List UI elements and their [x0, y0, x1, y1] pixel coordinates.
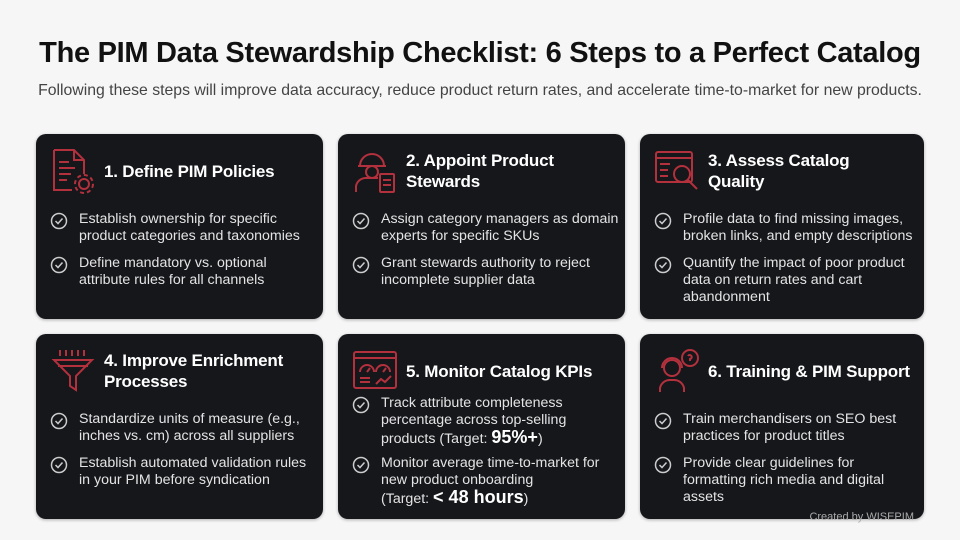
icon: dashboard	[353, 351, 397, 389]
checklist: (Target: < 48 hours)	[381, 487, 528, 507]
checklist: incomplete supplier data	[381, 272, 535, 288]
checklist: assets	[683, 489, 724, 505]
heading	[708, 151, 849, 191]
checklist: Define mandatory vs. optional	[79, 255, 267, 271]
checklist: Train merchandisers on SEO best	[683, 411, 896, 427]
checklist: data on return rates and cart	[683, 272, 862, 288]
checklist: product categories and taxonomies	[79, 228, 300, 244]
panel: step 5	[338, 334, 625, 519]
heading: Processes	[104, 372, 187, 391]
checklist: Monitor average time-to-market for	[381, 455, 599, 471]
checklist: Standardize units of measure (e.g.,	[79, 411, 300, 427]
heading: 4. Improve Enrichment	[104, 351, 283, 370]
heading: 3. Assess Catalog	[708, 151, 849, 170]
icon: support agent	[659, 349, 699, 392]
heading	[104, 351, 284, 391]
icon: steward	[355, 153, 395, 193]
checklist: Establish automated validation rules	[79, 455, 306, 471]
checklist: products (Target: 95%+)	[381, 427, 543, 447]
checklist	[654, 411, 896, 505]
heading: 5. Monitor Catalog KPIs	[406, 362, 592, 380]
checklist: broken links, and empty descriptions	[683, 228, 912, 244]
checklist	[50, 411, 306, 488]
heading: Quality	[708, 172, 764, 191]
checklist: percentage across top-selling	[381, 412, 566, 428]
checklist: abandonment	[683, 289, 770, 305]
heading: 2. Appoint Product	[406, 151, 554, 170]
checklist	[654, 211, 912, 305]
title: The PIM Data Stewardship Checklist: 6 Steps to a Perfect Catalog	[39, 37, 921, 69]
heading: 6. Training & PIM Support	[708, 362, 910, 380]
checklist: Establish ownership for specific	[79, 211, 277, 227]
heading: Stewards	[406, 172, 480, 191]
checklist	[50, 211, 300, 288]
checklist: formatting rich media and digital	[683, 472, 884, 488]
heading	[406, 151, 554, 191]
checklist: in your PIM before syndication	[79, 472, 270, 488]
checklist: practices for product titles	[683, 428, 845, 444]
checklist	[352, 395, 600, 507]
checklist: Grant stewards authority to reject	[381, 255, 590, 271]
checklist: Provide clear guidelines for	[683, 455, 854, 471]
panel: step 2	[338, 134, 625, 319]
panel: step 6	[640, 334, 924, 519]
icon: magnifier window	[655, 151, 698, 190]
panel: step 4	[36, 334, 323, 519]
checklist	[352, 211, 618, 288]
panel: step 3	[640, 134, 924, 319]
checklist: inches vs. cm) across all suppliers	[79, 428, 294, 444]
checklist: Assign category managers as domain	[381, 211, 618, 227]
checklist: Quantify the impact of poor product	[683, 255, 905, 271]
credit: Created by WISEPIM	[809, 511, 914, 523]
heading: 1. Define PIM Policies	[104, 162, 274, 180]
checklist: Track attribute completeness	[381, 395, 563, 411]
subtitle: Following these steps will improve data accuracy, reduce product return rates, and accelerate time-to-market for new products.	[38, 82, 922, 99]
icon: funnel	[52, 350, 94, 392]
checklist: new product onboarding	[381, 472, 533, 488]
checklist: attribute rules for all channels	[79, 272, 264, 288]
checklist: experts for specific SKUs	[381, 228, 539, 244]
checklist: Profile data to find missing images,	[683, 211, 903, 227]
icon: document gear	[53, 149, 94, 194]
panel: step 1	[36, 134, 323, 319]
